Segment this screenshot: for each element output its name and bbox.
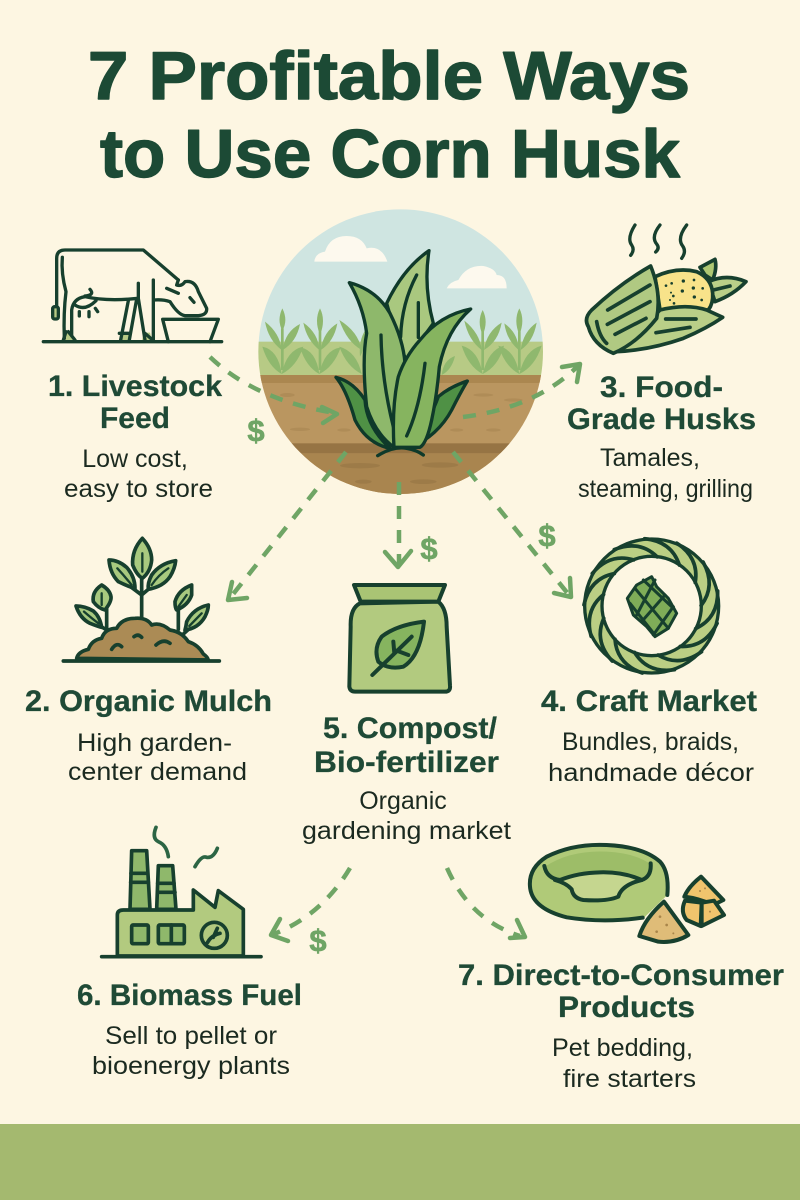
icon: seedlings in mulch [63,538,219,661]
dollar signs: $ [538,518,556,553]
bottom band [0,1124,800,1200]
arrow: to compost [385,482,411,567]
heading: craft market: handmade décor [548,759,754,787]
heading: food-grade husks: Tamales, [600,444,700,472]
heading: biomass fuel: Sell to pellet or [105,1022,277,1050]
heading: organic mulch: 2. Organic Mulch [25,685,272,718]
heading: craft market: Bundles, braids, [562,728,739,756]
central illustration: corn plant in field [258,209,543,494]
heading: craft market: 4. Craft Market [541,685,757,718]
icon: corn in husk with steam [586,225,746,353]
heading: livestock feed: 1. Livestock [48,370,222,403]
title: 7 Profitable Ways [88,38,690,114]
heading: biomass fuel [77,979,302,1080]
heading: livestock feed: Low cost, [82,445,188,473]
heading: livestock feed: Feed [100,402,170,435]
heading: direct-to-consumer products: Products [558,991,695,1024]
arrow: to livestock feed center [210,357,337,423]
heading: organic mulch: High garden- [77,729,232,757]
heading: food-grade husks [567,371,756,503]
corn plant leaves [336,251,471,456]
arrow: to food-grade husks [463,364,580,417]
dollar signs: $ [420,531,438,566]
arrow: to organic mulch [228,452,346,600]
icon: braided wreath and bundle [579,534,723,678]
arrow: to biomass fuel [271,868,350,941]
heading: compost / bio-fertilizer [302,712,511,845]
icon: pet bed and fire starters [530,845,724,942]
heading: compost / bio-fertilizer: Organic [359,787,447,815]
heading: food-grade husks: Grade Husks [567,403,756,436]
icon: compost bag [349,585,450,692]
title: to Use Corn Husk [100,116,680,192]
heading: livestock feed [48,370,222,503]
heading: compost / bio-fertilizer: 5. Compost/ [323,712,498,745]
arrow: to direct-to-consumer [447,868,525,938]
heading: direct-to-consumer products: 7. Direct-to-Consumer [458,959,784,992]
heading: livestock feed: easy to store [64,475,213,503]
arrow: to craft market [453,452,571,597]
icon: factory [102,827,261,957]
heading: direct-to-consumer products: fire starters [563,1065,696,1093]
dollar signs: $ [247,413,265,448]
heading: organic mulch: center demand [68,758,247,786]
heading: organic mulch [25,685,272,786]
heading: craft market [541,685,757,787]
heading: compost / bio-fertilizer: Bio-fertilizer [314,746,499,779]
heading: direct-to-consumer products: Pet bedding, [552,1034,693,1062]
heading: biomass fuel: 6. Biomass Fuel [77,979,302,1012]
dollar signs [247,413,556,958]
title [88,38,690,192]
heading: food-grade husks: steaming, grilling [578,475,753,503]
heading: biomass fuel: bioenergy plants [92,1052,290,1080]
heading: compost / bio-fertilizer: gardening market [302,817,511,845]
dollar signs: $ [309,923,327,958]
heading: direct-to-consumer products [458,959,784,1093]
icon: cow at trough [43,250,222,342]
heading: food-grade husks: 3. Food- [600,371,723,404]
